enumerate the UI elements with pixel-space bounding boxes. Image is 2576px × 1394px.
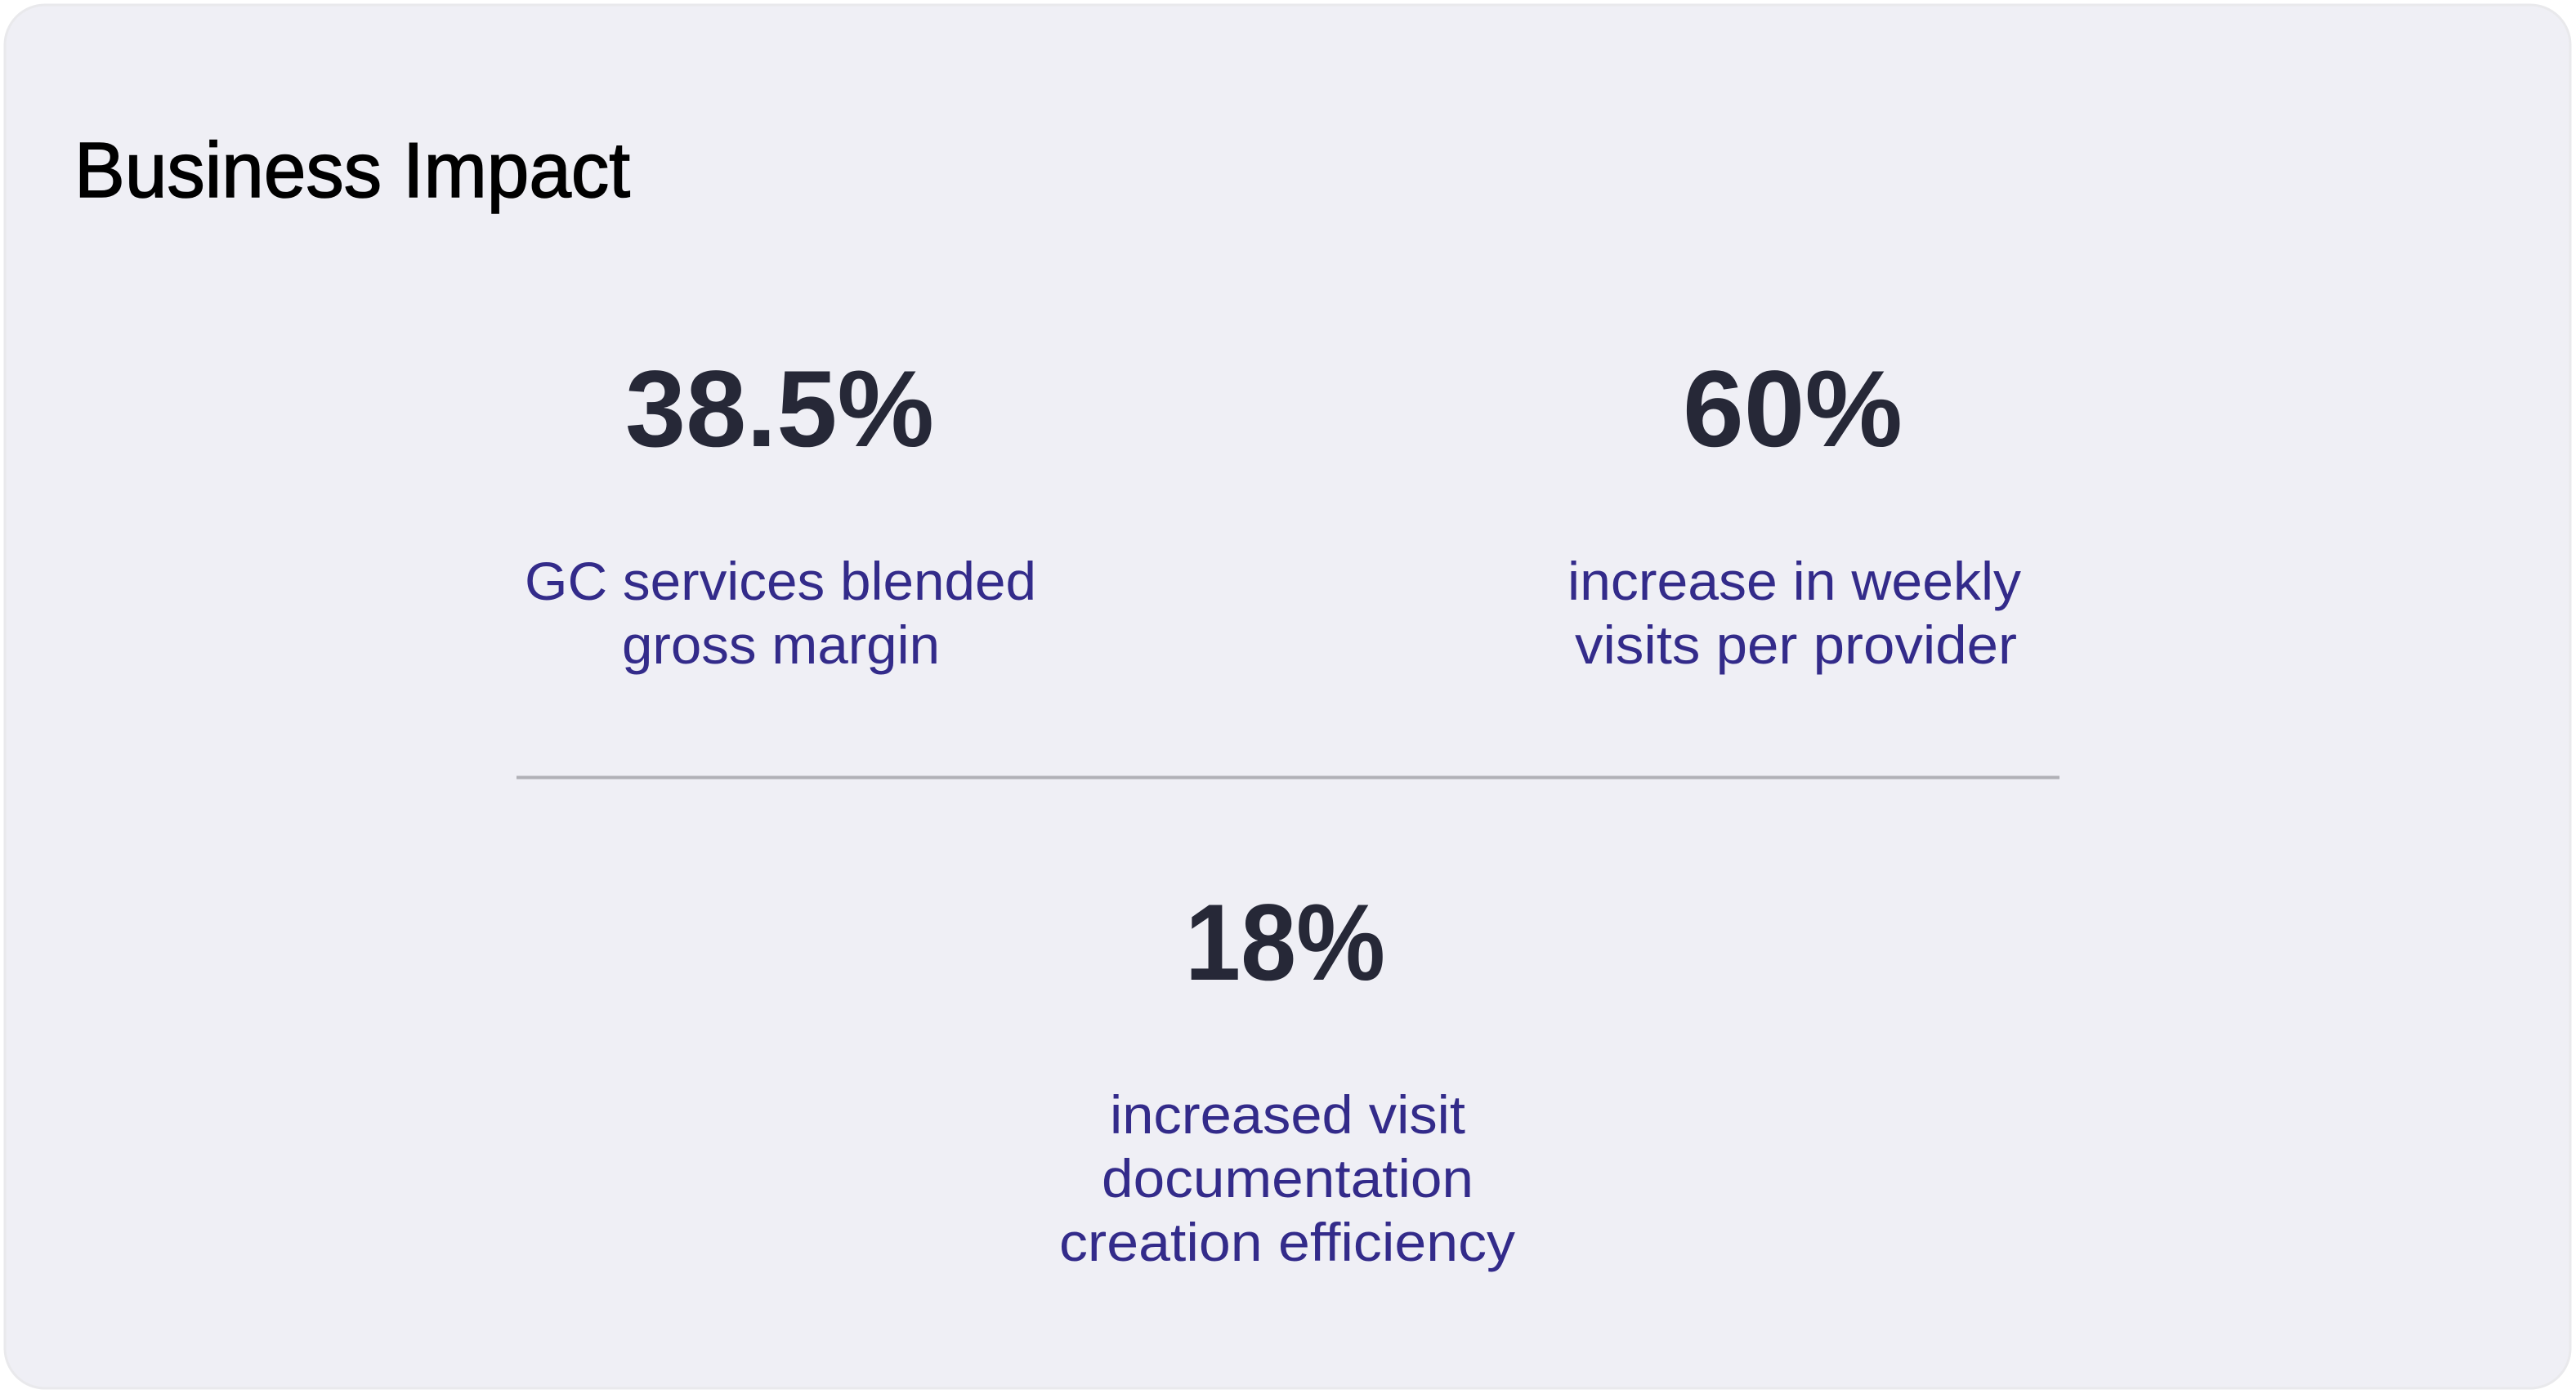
label: increased visit documentation creation efficiency: creation efficiency	[1059, 1212, 1515, 1272]
label: increase in weekly visits per provider	[1568, 551, 2021, 675]
metric: 38.5% gross margin	[525, 349, 1036, 675]
label: GC services blended gross margin	[525, 551, 1036, 675]
label: GC services blended gross margin: GC services blended	[525, 551, 1036, 611]
metric: 18% documentation efficiency	[1059, 882, 1515, 1272]
number: 60%: 60%	[1683, 349, 1903, 470]
divider line	[517, 776, 2059, 780]
metric: 60% weekly visits	[1568, 349, 2021, 675]
label: increase in weekly visits per provider: visits per provider	[1575, 614, 2017, 675]
label: GC services blended gross margin: gross margin	[622, 614, 940, 675]
label: increased visit documentation creation efficiency	[1059, 1084, 1515, 1272]
label: increase in weekly visits per provider: increase in weekly	[1568, 551, 2021, 611]
title: Business Impact	[74, 127, 630, 214]
label: increased visit documentation creation efficiency: increased visit	[1110, 1084, 1465, 1145]
label: increased visit documentation creation efficiency: documentation	[1102, 1148, 1474, 1209]
number: 18%: 18%	[1185, 882, 1385, 1003]
number: 38.5%: 38.5%	[625, 349, 934, 470]
